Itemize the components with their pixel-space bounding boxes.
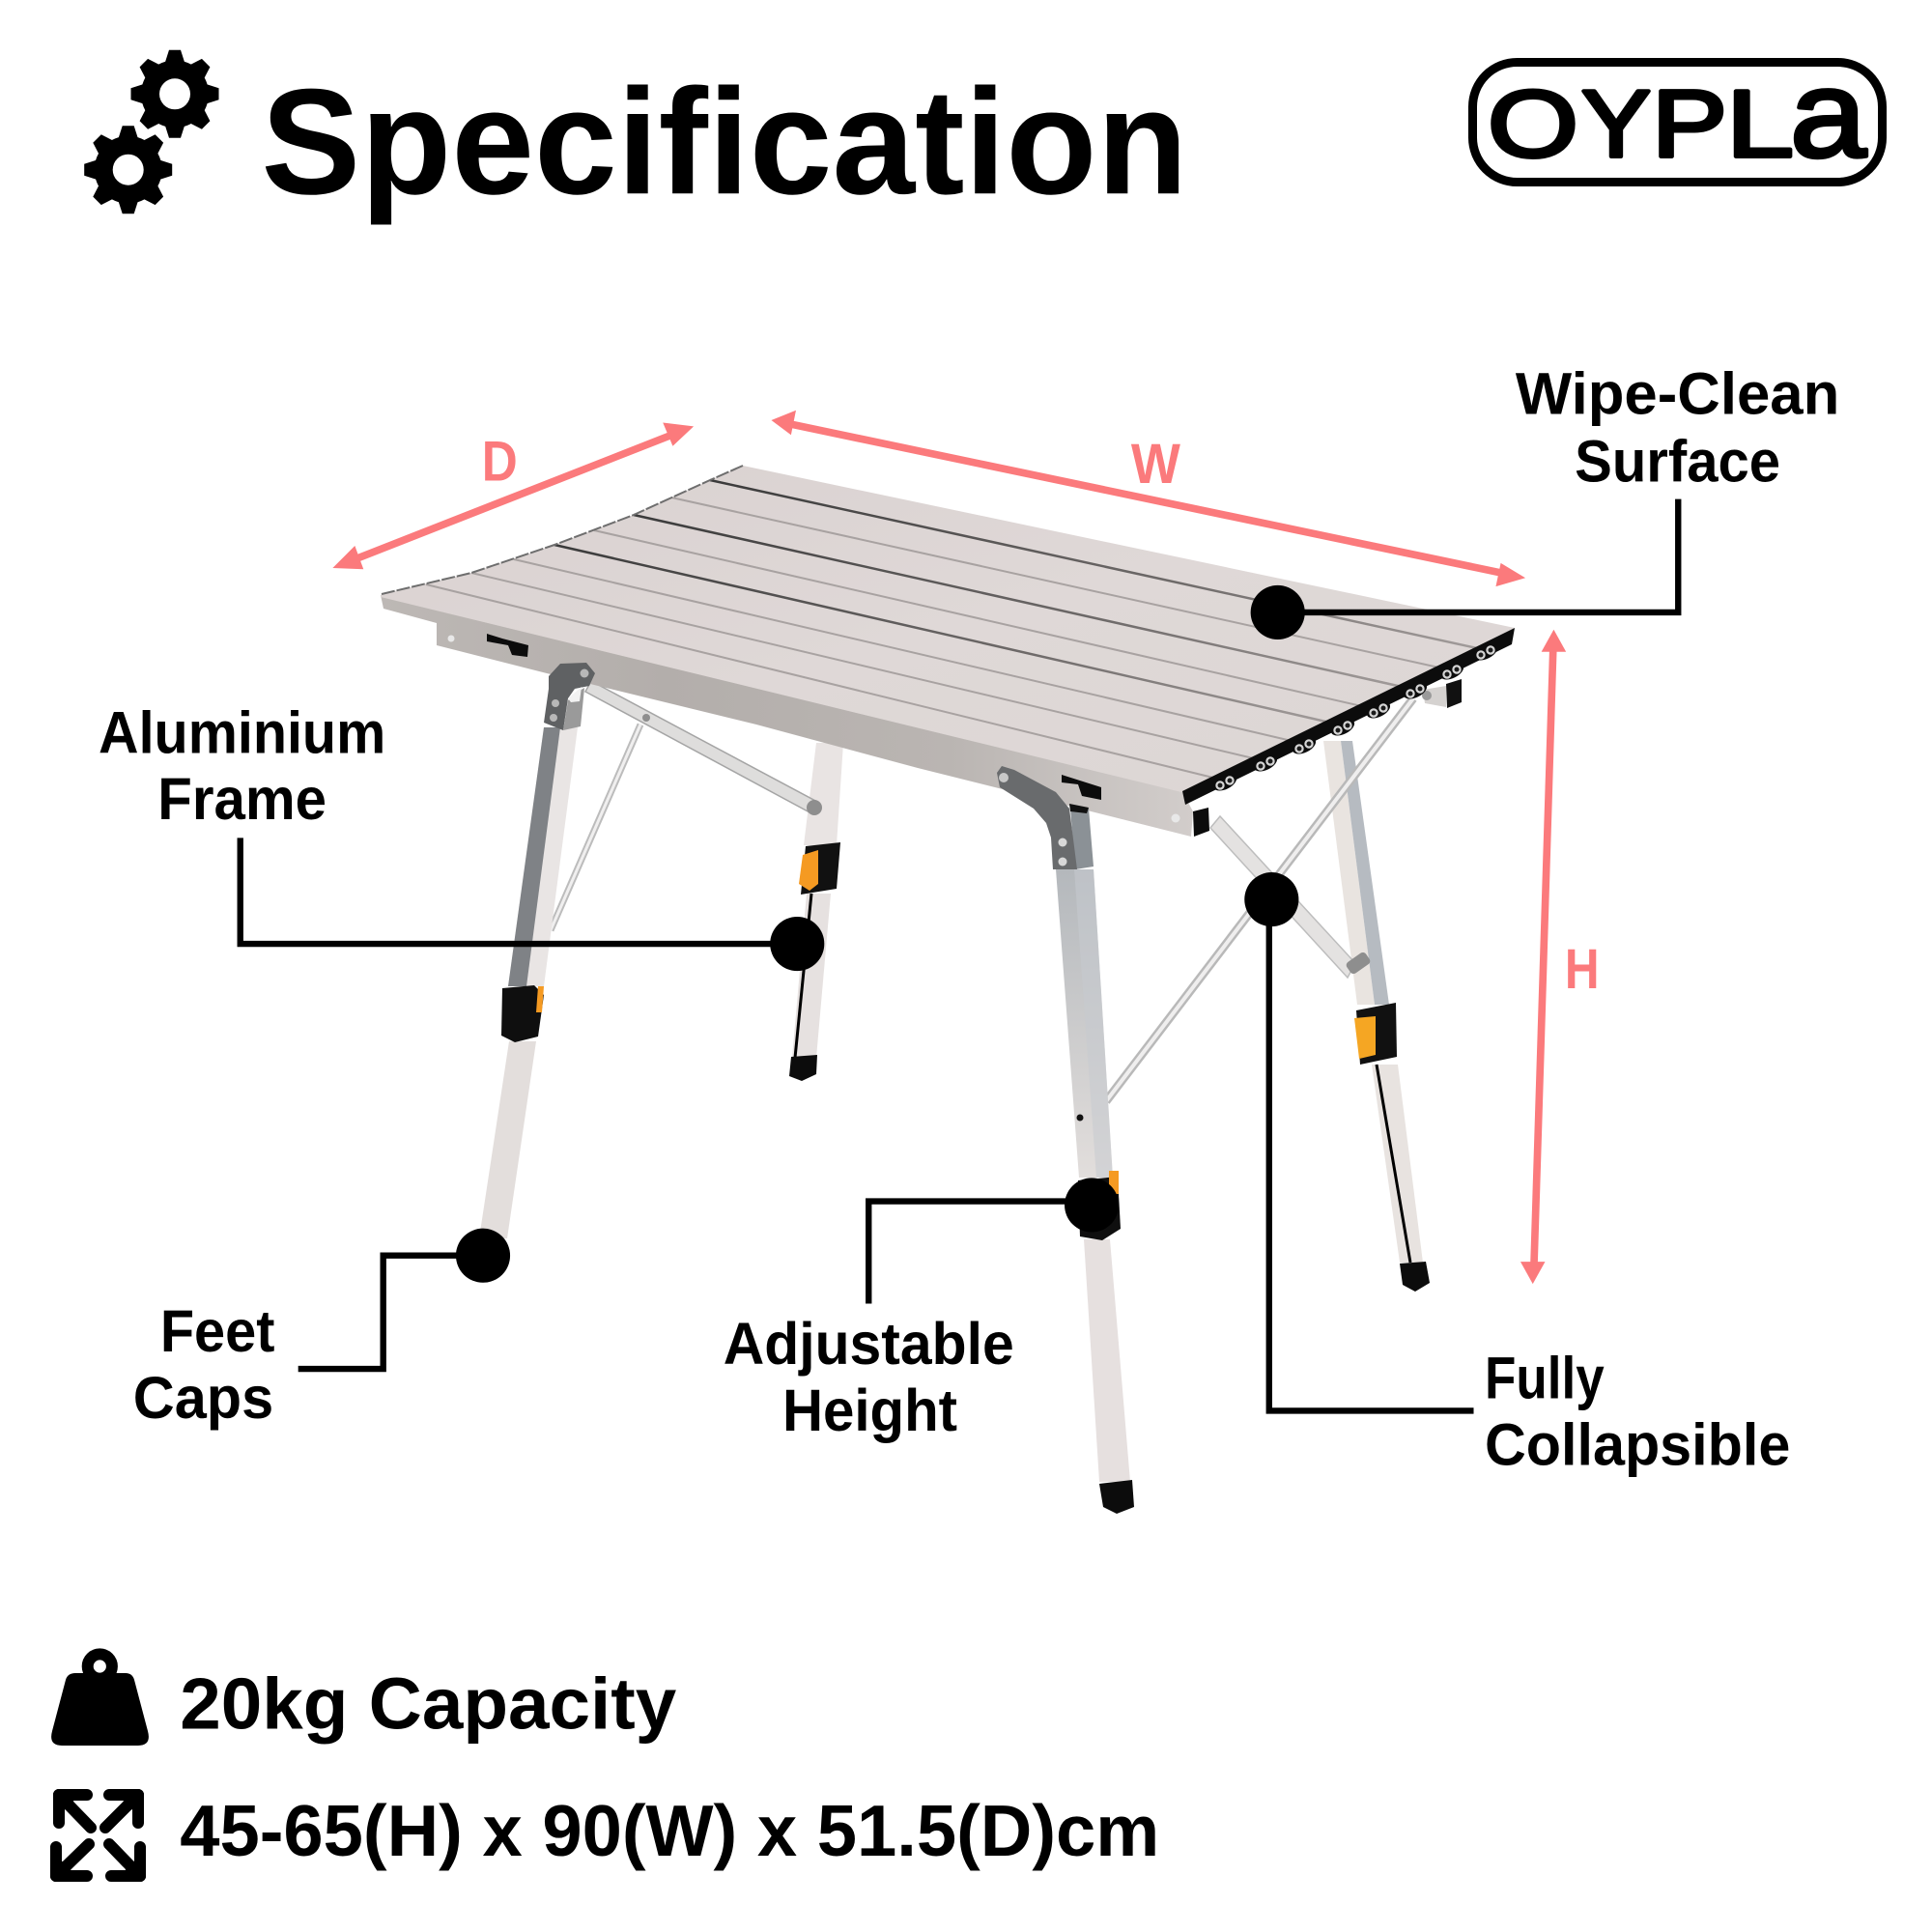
callout: Wipe-Clean Surface: Surface: [1575, 429, 1780, 495]
dimension arrow: W: [771, 411, 1525, 586]
table photo illustration: [381, 466, 1515, 1514]
dimension arrow: W: W: [1131, 433, 1181, 496]
far rail end block: [1422, 679, 1462, 708]
slat end strip with rivets: [1182, 628, 1515, 805]
front-right leg: [997, 766, 1134, 1514]
callout: Aluminium Frame: Frame: [157, 766, 327, 832]
tabletop front edge and rail: [381, 595, 1193, 837]
callout: Fully Collapsible: Fully: [1485, 1346, 1605, 1411]
logo: OYPLa: P: [1652, 71, 1727, 177]
logo: OYPLa: L: [1726, 71, 1794, 177]
left brace: [551, 681, 822, 930]
title: Specification: [261, 57, 1188, 225]
logo: OYPLa: O: [1488, 71, 1578, 177]
callout: Wipe-Clean Surface: [1251, 361, 1839, 639]
dimension arrow: D: [332, 423, 694, 569]
capacity text: 20kg Capacity: [180, 1663, 676, 1745]
logo: OYPLa: a: [1790, 45, 1867, 184]
icon: weight: [51, 1654, 149, 1746]
callout: Wipe-Clean Surface: Wipe-Clean: [1516, 361, 1839, 427]
callout: Feet Caps: [133, 1229, 510, 1431]
logo: OYPLa: [1472, 45, 1882, 184]
callout: Feet Caps: Feet: [160, 1298, 274, 1364]
callout: Adjustable Height: [724, 1178, 1119, 1443]
front-left leg: [479, 663, 595, 1238]
logo: OYPLa: Y: [1581, 71, 1651, 177]
icon: expand arrows: [56, 1795, 140, 1876]
slat grooves: [426, 480, 1486, 781]
right brace: [1106, 698, 1413, 1101]
callout: Feet Caps: Caps: [133, 1365, 273, 1431]
latches and end block: [487, 634, 1209, 837]
icon: gears: [84, 50, 218, 213]
dimension arrow: H: [1520, 630, 1600, 1284]
back-right leg: [1323, 741, 1430, 1292]
back-left leg: [789, 743, 843, 1081]
dimension arrow: D: D: [482, 430, 518, 493]
callout: Adjustable Height: Adjustable: [724, 1311, 1014, 1377]
callout: Fully Collapsible: Collapsible: [1485, 1412, 1790, 1478]
callout: Aluminium Frame: [99, 699, 824, 971]
callout: Adjustable Height: Height: [782, 1378, 957, 1443]
dimensions text: 45-65(H) x 90(W) x 51.5(D)cm: [180, 1790, 1159, 1871]
dimension arrow: H: H: [1565, 938, 1600, 1001]
tabletop surface: [381, 466, 1515, 805]
callout: Fully Collapsible: [1244, 872, 1790, 1478]
callout: Aluminium Frame: Aluminium: [99, 699, 385, 765]
